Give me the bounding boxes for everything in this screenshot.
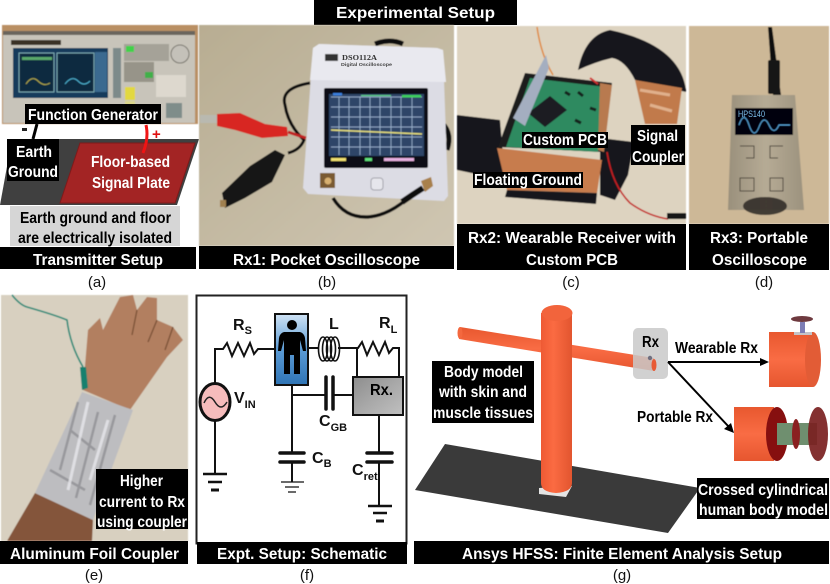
- panel: wearable receiver: [457, 26, 686, 270]
- label: function generator: Function Generator: [28, 107, 158, 124]
- voltage source: [200, 384, 230, 420]
- label: floor-based signal plate: [91, 154, 170, 192]
- title: [314, 0, 517, 25]
- label: wearable Rx: Wearable Rx: [675, 340, 758, 357]
- floor plate: [415, 444, 700, 533]
- label: custom PCB: Custom PCB: [523, 132, 607, 149]
- Rx highlight: [633, 328, 668, 379]
- caption f: Expt. Setup: Schematic: [217, 546, 387, 563]
- panel: schematic: [196, 296, 407, 564]
- label: floor-based signal plate: Signal Plate: [92, 175, 170, 192]
- label: body model: with skin and: [438, 384, 527, 401]
- schematic frame: [196, 296, 406, 544]
- label: higher current: using coupler: [97, 514, 187, 531]
- caption b: [199, 246, 454, 269]
- circuit labels: GB: [331, 422, 347, 434]
- label: body model: muscle tissues: [433, 405, 533, 422]
- capacitors: [280, 377, 392, 462]
- torso cylinder: [541, 305, 572, 493]
- title: Experimental Setup: [336, 5, 495, 22]
- photo: portable oscilloscope: [689, 26, 829, 224]
- photo: arm with foil: [1, 295, 188, 541]
- photo: wearable receiver: [457, 26, 686, 224]
- label: floor-based signal plate: Floor-based: [91, 154, 170, 171]
- black wire: [33, 124, 37, 139]
- photo: function generator: [2, 25, 198, 124]
- base plate: [539, 486, 572, 497]
- caption e: Aluminum Foil Coupler: [10, 546, 179, 563]
- panel: finite element setup: [414, 305, 829, 564]
- label: signal coupler: Coupler: [632, 149, 684, 166]
- panel: portable oscilloscope: [689, 26, 829, 270]
- note: electrical isolation: Earth ground and floor: [20, 210, 171, 227]
- label (d): (d): [755, 274, 773, 291]
- label: signal coupler: [631, 125, 685, 166]
- photo: pocket oscilloscope: [199, 25, 454, 246]
- circuit labels: C: [312, 450, 324, 467]
- label: portable Rx: Portable Rx: [637, 409, 713, 426]
- caption c: Rx2: Wearable Receiver with: [468, 230, 676, 247]
- caption f: [197, 542, 407, 564]
- circuit labels: C: [352, 462, 364, 479]
- oscilloscope brand text: [341, 53, 393, 67]
- arrow: to portable Rx: [668, 362, 734, 433]
- circuit labels: L: [391, 324, 398, 336]
- circuit labels: V: [234, 390, 245, 407]
- label: earth ground: Ground: [8, 164, 58, 181]
- caption d: Rx3: Portable: [710, 230, 808, 247]
- label: crossed cylindrical model: [697, 478, 829, 519]
- circuit wires: [215, 342, 399, 505]
- label: body model: [432, 361, 534, 423]
- red floor-based signal plate: [60, 143, 195, 203]
- panel: pocket oscilloscope: [199, 25, 454, 269]
- Rx highlight: Rx: [642, 334, 659, 351]
- label: higher current: current to Rx: [99, 494, 185, 511]
- arm cylinder: [459, 327, 654, 371]
- note: electrical isolation: [10, 206, 180, 247]
- circuit labels: R: [233, 317, 245, 334]
- circuit labels: L: [329, 316, 339, 333]
- dark earth ground plate: [0, 139, 199, 205]
- panel: aluminum foil coupler: [0, 295, 188, 564]
- caption d: [689, 224, 829, 270]
- label: floating ground: Floating Ground: [474, 172, 582, 189]
- arrow: to wearable Rx: [668, 358, 769, 366]
- caption c: Custom PCB: [526, 252, 618, 269]
- portable Rx model: [734, 407, 828, 461]
- oscilloscope brand text: Digital Oscilloscope: [341, 62, 393, 67]
- label (g): (g): [613, 567, 631, 584]
- plus sign: +: [152, 126, 161, 143]
- wearable Rx model: [769, 316, 821, 387]
- label (b): (b): [318, 274, 336, 291]
- panel: transmitter setup: [0, 25, 199, 269]
- caption g: [414, 541, 829, 564]
- label: earth ground: Earth: [16, 144, 52, 161]
- circuit labels: B: [324, 458, 332, 470]
- label (f): (f): [300, 567, 314, 584]
- Rx block: Rx.: [370, 382, 393, 399]
- circuit labels: S: [245, 325, 252, 337]
- ground symbols: [203, 474, 392, 521]
- label (a): (a): [88, 274, 106, 291]
- label (e): (e): [85, 567, 103, 584]
- minus sign: [22, 128, 27, 131]
- caption g: Ansys HFSS: Finite Element Analysis Setup: [462, 546, 782, 563]
- body block with person icon: [275, 314, 308, 385]
- screen text: HPS140: [738, 109, 765, 119]
- caption e: [0, 541, 188, 564]
- caption b: Rx1: Pocket Oscilloscope: [233, 252, 420, 269]
- label: body model: Body model: [444, 364, 523, 381]
- red wire: [143, 125, 147, 153]
- circuit labels: [233, 315, 398, 483]
- oscilloscope brand text: DSO112A: [342, 53, 378, 62]
- label: higher current: [96, 469, 188, 531]
- caption c: [457, 224, 686, 270]
- circuit labels: ret: [364, 471, 378, 483]
- circuit labels: C: [319, 413, 331, 430]
- label: earth ground: [7, 139, 59, 181]
- label: signal coupler: Signal: [637, 128, 678, 145]
- Rx block: [353, 377, 403, 415]
- note: electrical isolation: are electrically isolated: [18, 230, 172, 247]
- circuit labels: R: [379, 315, 391, 332]
- caption d: Oscilloscope: [712, 252, 807, 269]
- caption a: Transmitter Setup: [33, 252, 163, 269]
- caption a: [0, 247, 196, 269]
- inductor L: [318, 337, 340, 361]
- label: higher current: Higher: [120, 473, 163, 490]
- label (c): (c): [562, 274, 580, 291]
- circuit labels: IN: [245, 399, 256, 411]
